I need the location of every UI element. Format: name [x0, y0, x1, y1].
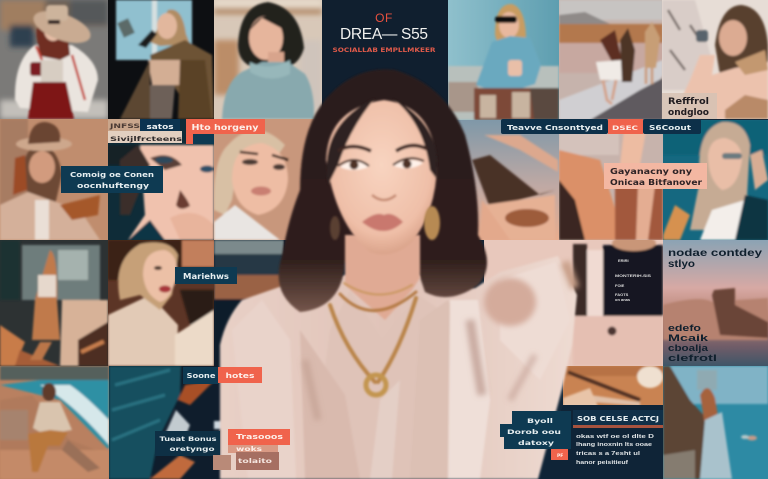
title: main heading: DREA— S55	[340, 26, 428, 43]
photo: woman in brown hat on tan wall	[0, 119, 108, 240]
label: Teave banner: S6Coout	[649, 124, 692, 132]
left eyebrow and eye	[338, 146, 371, 151]
label: cream note: JNFSS	[109, 122, 140, 130]
lips	[362, 214, 403, 231]
text: side list: edefo	[668, 323, 701, 334]
label: Reffrol ondgloo: ondgloo	[668, 108, 709, 118]
earring left	[330, 216, 340, 240]
photo: desert rock with overlaid text	[663, 240, 768, 366]
photo: blonde woman in knit sweater	[108, 240, 214, 366]
earring right	[424, 206, 440, 240]
book text: ERIRI	[618, 258, 629, 263]
label: Teave banner: Teavve Cnsonttyed	[507, 124, 603, 132]
label: satos: satos	[146, 123, 174, 131]
photo: close-up woman hand on mouth	[108, 143, 214, 240]
photo: beach with hand and cliff	[456, 120, 559, 240]
photo: hand and sand close-up	[559, 120, 663, 240]
text: nodae contdey style: stlyo	[668, 259, 695, 270]
label: Tueat bonus: Tueat Bonus	[160, 435, 217, 443]
label: cream note: Sivijlfrcteens	[110, 135, 182, 143]
label: Trasooos: woks	[236, 446, 263, 453]
label: Mariehws: Mariehws	[183, 272, 230, 281]
label: Tueat bonus	[155, 431, 220, 456]
label: Reffrol ondgloo	[662, 93, 717, 119]
photo: woman in pale dress on cliff above blue sea	[663, 366, 768, 479]
photo: woman on marble bedding	[662, 0, 768, 119]
photo: dusk landscape strip	[214, 240, 284, 366]
photo: woman in blue shirt and sunglasses	[448, 0, 559, 120]
paragraph: okas wtf oe ol dlte D	[576, 434, 654, 440]
book text: on anas	[615, 297, 631, 302]
fur texture	[305, 262, 575, 420]
central portrait	[220, 69, 577, 479]
label: small coral tag: PF	[557, 453, 563, 459]
neck	[345, 235, 420, 320]
label: Byoll Dorob: Byoll	[527, 417, 553, 425]
label: satos	[140, 119, 180, 132]
label: Comoig oe Conen: Comoig oe Conen	[70, 171, 154, 179]
book text	[615, 258, 651, 302]
label: Teave banner	[501, 119, 701, 134]
panel: bottom navy text block: SOB CELSE ACTCJ	[577, 415, 659, 423]
label: Gayanacy	[604, 163, 707, 189]
label: Trasooos: tolaito	[238, 458, 272, 465]
heading: SOB celse	[573, 410, 663, 425]
label: cream note	[108, 119, 182, 143]
text: nodae contdey style	[668, 248, 763, 270]
paragraph: lhang inoxnin lts ooae	[576, 442, 652, 448]
paragraph: tricas s a 7esht ul	[576, 451, 641, 457]
label: Soone	[183, 367, 219, 384]
label: Gayanacy: Onicaa Bitfanover	[610, 178, 702, 187]
label: Byoll Dorob: Dorob oou	[507, 428, 562, 436]
face	[326, 98, 437, 254]
photo: black book with text	[484, 240, 663, 366]
photo: teal denim fabric	[109, 366, 222, 479]
subtitle: SOCIALLAB EMPLLMKEER	[332, 47, 436, 54]
label: Comoig oe Conen: oocnhuftengy	[77, 182, 150, 190]
title panel	[322, 0, 449, 110]
label: Gayanacy: Gayanacny ony	[610, 167, 692, 176]
title: OF: OF	[375, 11, 393, 25]
label: Tueat bonus: oretyngo	[170, 445, 215, 453]
photo: woman on rocks by turquoise water	[0, 366, 109, 479]
gold necklaces	[330, 283, 416, 395]
photo: three women on seaside wall	[559, 0, 662, 120]
text: nodae contdey style: nodae contdey	[668, 248, 763, 259]
panel: bottom navy text block	[538, 405, 663, 479]
label: Teave banner: DSEC	[612, 124, 638, 132]
book text: FOIE	[615, 283, 625, 288]
photo: pen and orange desk	[563, 366, 663, 405]
label: hotes	[218, 367, 262, 383]
text: side list: cboalja	[668, 343, 709, 354]
paragraph	[576, 434, 654, 466]
label: Comoig oe Conen	[61, 166, 163, 193]
label: Trasooos: Trasooos	[236, 433, 283, 441]
photo: blonde woman over teal sea	[663, 120, 768, 240]
paragraph: hanor peisitieuf	[576, 460, 628, 466]
photo: woman in chain interior	[0, 240, 108, 366]
label: Byoll Dorob	[500, 411, 571, 460]
label: Trasooos	[213, 429, 290, 470]
hair	[279, 69, 487, 312]
nose shading	[372, 195, 396, 200]
book text: MONTERIH.SIS	[615, 273, 651, 278]
text: side list: clefrotl	[668, 353, 717, 364]
label: hotes: hotes	[226, 372, 254, 380]
label: Reffrol ondgloo: Refffrol	[668, 97, 709, 107]
photo: woman in olive jacket by window	[108, 0, 214, 119]
book text: FAOTS	[615, 292, 629, 297]
label: Hto horgeny	[186, 119, 265, 144]
photo: woman in wide hat and white coat	[0, 0, 108, 119]
hair front strands	[327, 98, 375, 185]
photo: blonde woman close-up	[214, 119, 315, 240]
photo: woman in blue turtleneck	[214, 0, 322, 119]
text: side list	[668, 323, 717, 364]
label: Byoll Dorob: datoxy	[518, 439, 555, 447]
label: Hto horgeny: Hto horgeny	[192, 123, 259, 132]
sweater	[220, 256, 577, 479]
label: Soone: Soone	[186, 372, 216, 380]
text: side list: Mcaik	[668, 333, 709, 344]
label: Mariehws	[175, 267, 237, 284]
right eyebrow and eye	[396, 145, 427, 151]
